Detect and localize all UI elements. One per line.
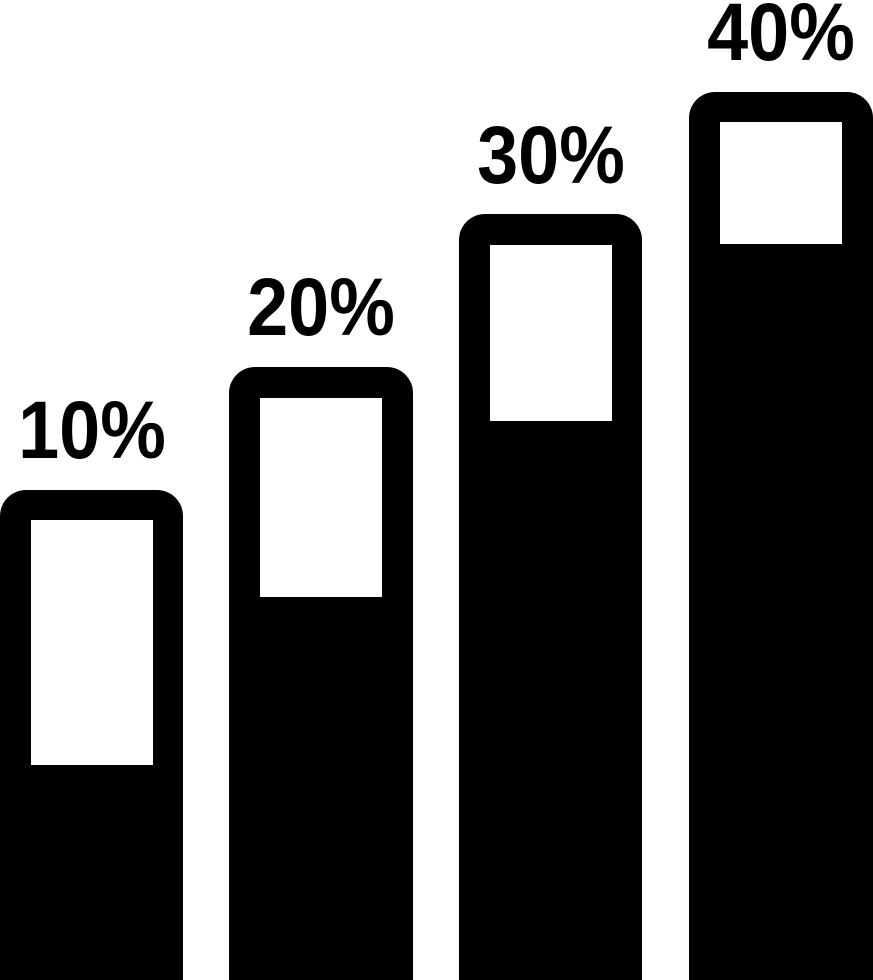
bar: 30%: [459, 214, 642, 980]
label: 20%: 20%: [247, 260, 395, 353]
bar: 10%: [0, 490, 183, 980]
bar: 40%: [689, 92, 873, 980]
label: 10%: 10%: [18, 383, 166, 476]
label: 30%: 30%: [477, 108, 625, 201]
bar: 20%: [229, 367, 413, 980]
